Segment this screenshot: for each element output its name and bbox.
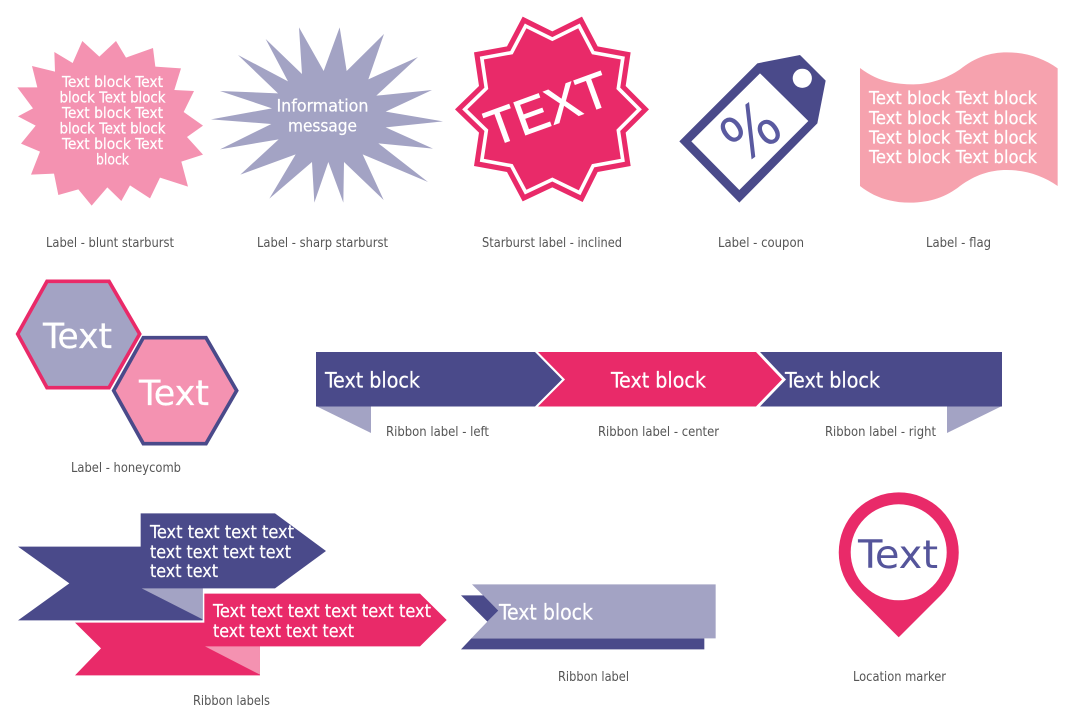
label: blunt starburst: block Text block [60, 88, 166, 106]
caption: ribbon label: Ribbon label [558, 670, 629, 685]
caption: ribbon left: Ribbon label - left [386, 425, 489, 440]
label: blunt starburst: Text block Text [61, 73, 163, 91]
ribbon segment: left: Text block [324, 368, 420, 392]
label: flag: Text block Text block [868, 148, 1038, 168]
ribbon: pink [75, 594, 447, 675]
label: flag: Text block Text block [868, 128, 1038, 148]
caption: ribbon right: Ribbon label - right [825, 425, 936, 440]
ribbon segment: right [760, 352, 1002, 406]
caption: inclined starburst: Starburst label - inclined [482, 236, 622, 251]
ribbon fold: left [316, 406, 371, 433]
honeycomb cell: lavender: Text [42, 317, 112, 357]
ribbon label: single: Text block [498, 600, 593, 624]
caption: coupon: Label - coupon [718, 236, 804, 251]
caption: ribbon center: Ribbon label - center [598, 425, 719, 440]
label: inclined starburst: TEXT [478, 61, 617, 157]
label: blunt starburst: Text block Text [61, 104, 163, 122]
location marker: Text [857, 533, 938, 578]
label: coupon [679, 55, 826, 203]
caption: blunt starburst: Label - blunt starburst [46, 236, 174, 251]
label: honeycomb [18, 281, 237, 444]
ribbon: navy: text text text text [150, 543, 291, 563]
label: sharp starburst [211, 27, 443, 203]
ribbon: navy [18, 513, 326, 620]
honeycomb cell: pink [114, 338, 237, 444]
ribbon segment: right: Text block [784, 368, 880, 392]
label: blunt starburst: Text block Text [61, 135, 163, 153]
honeycomb cell: pink: Text [138, 374, 209, 414]
ribbon: pink: text text text text [213, 622, 354, 642]
ribbon: navy: Text text text text [149, 523, 294, 543]
ribbon segment: left [316, 352, 562, 406]
label: blunt starburst: block Text block [60, 120, 166, 138]
ribbon label: three segments [316, 352, 1002, 433]
location marker [839, 492, 959, 637]
ribbon segment: center [538, 352, 782, 406]
label: blunt starburst [17, 41, 203, 206]
label: inclined starburst [455, 17, 649, 202]
ribbon fold: right [947, 406, 1002, 433]
label: flag: Text block Text block [868, 89, 1038, 109]
ribbon labels: navy and pink [18, 513, 447, 675]
caption: flag: Label - flag [926, 236, 991, 251]
ribbon segment: center: Text block [610, 368, 706, 392]
honeycomb cell: lavender [18, 281, 140, 388]
ribbon: pink: Text text text text text text [212, 602, 431, 622]
caption: location marker: Location marker [853, 670, 946, 685]
label: coupon: % [708, 87, 795, 179]
label: sharp starburst: message [288, 116, 357, 136]
caption: sharp starburst: Label - sharp starburst [257, 236, 388, 251]
label: sharp starburst: Information [276, 96, 368, 116]
ribbon label: single [461, 584, 716, 649]
caption: ribbon labels: Ribbon labels [193, 694, 270, 709]
label: flag [860, 52, 1058, 203]
caption: honeycomb: Label - honeycomb [71, 461, 181, 476]
label: blunt starburst: block [96, 150, 129, 168]
label: flag: Text block Text block [868, 109, 1038, 129]
ribbon: navy: text text [150, 562, 218, 582]
